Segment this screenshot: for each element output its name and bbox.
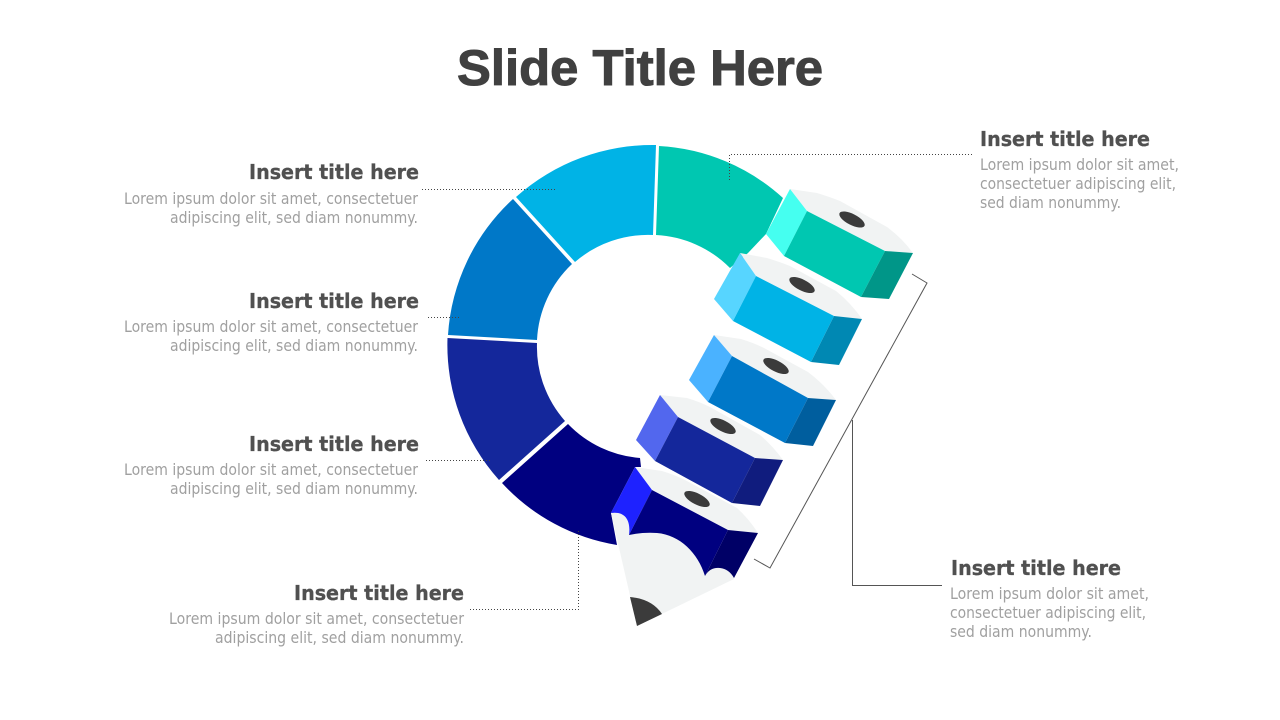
bracket connector to lower right text (852, 420, 942, 586)
text block: lower right: sed diam nonummy. (950, 622, 1092, 641)
leader line: top left (422, 188, 557, 190)
text block: third left: Lorem ipsum dolor sit amet, consectetuer (124, 460, 418, 479)
text block: top left: Lorem ipsum dolor sit amet, consectetuer (124, 189, 418, 208)
text block: top left (124, 160, 419, 227)
ring segment: navy (502, 424, 641, 545)
pencil block: medium blue (689, 335, 836, 446)
ring segment: light blue (516, 145, 656, 262)
text block: second left: Lorem ipsum dolor sit amet, consectetuer (124, 317, 418, 336)
text block: top right: Lorem ipsum dolor sit amet, (980, 155, 1179, 174)
text block: lower right: Lorem ipsum dolor sit amet, (950, 584, 1149, 603)
text block: lower right (950, 556, 1149, 641)
text block: top right (980, 127, 1179, 212)
pencil block: teal (766, 189, 913, 299)
text block: top right: Insert title here (980, 127, 1150, 151)
leader line: third left (426, 460, 492, 462)
text block: second left: Insert title here (249, 289, 419, 313)
text block: third left: adipiscing elit, sed diam nonummy. (170, 479, 418, 498)
ring segment: medium blue (448, 199, 572, 340)
text block: top right: sed diam nonummy. (980, 193, 1121, 212)
pencil block: indigo (636, 395, 783, 506)
ring segment: indigo (447, 338, 565, 480)
text block: third left: Insert title here (249, 432, 419, 456)
text block: bottom left: adipiscing elit, sed diam nonummy. (215, 628, 464, 647)
text block: lower right: Insert title here (951, 556, 1121, 580)
text block: bottom left: Lorem ipsum dolor sit amet, consectetuer (169, 609, 464, 628)
text block: third left (124, 432, 419, 498)
ring segment: teal (656, 146, 783, 268)
pencil block: light blue (714, 253, 862, 365)
bracket spanning pencil blocks (754, 274, 927, 568)
text block: top left: adipiscing elit, sed diam nonummy. (170, 208, 418, 227)
leader line: bottom left (470, 529, 578, 610)
text block: bottom left (169, 581, 464, 647)
pencil tip and navy block (611, 467, 758, 626)
text block: second left (124, 289, 419, 355)
leader line: top right (730, 154, 972, 180)
text block: lower right: consectetuer adipiscing elit, (950, 603, 1146, 622)
text block: top left: Insert title here (249, 160, 419, 184)
text block: bottom left: Insert title here (294, 581, 464, 605)
text block: top right: consectetuer adipiscing elit, (980, 174, 1176, 193)
text block: second left: adipiscing elit, sed diam nonummy. (170, 336, 418, 355)
title: Slide Title Here (457, 40, 823, 96)
leader line: second left (428, 316, 460, 318)
ring chart: curved pencil body (447, 145, 783, 545)
